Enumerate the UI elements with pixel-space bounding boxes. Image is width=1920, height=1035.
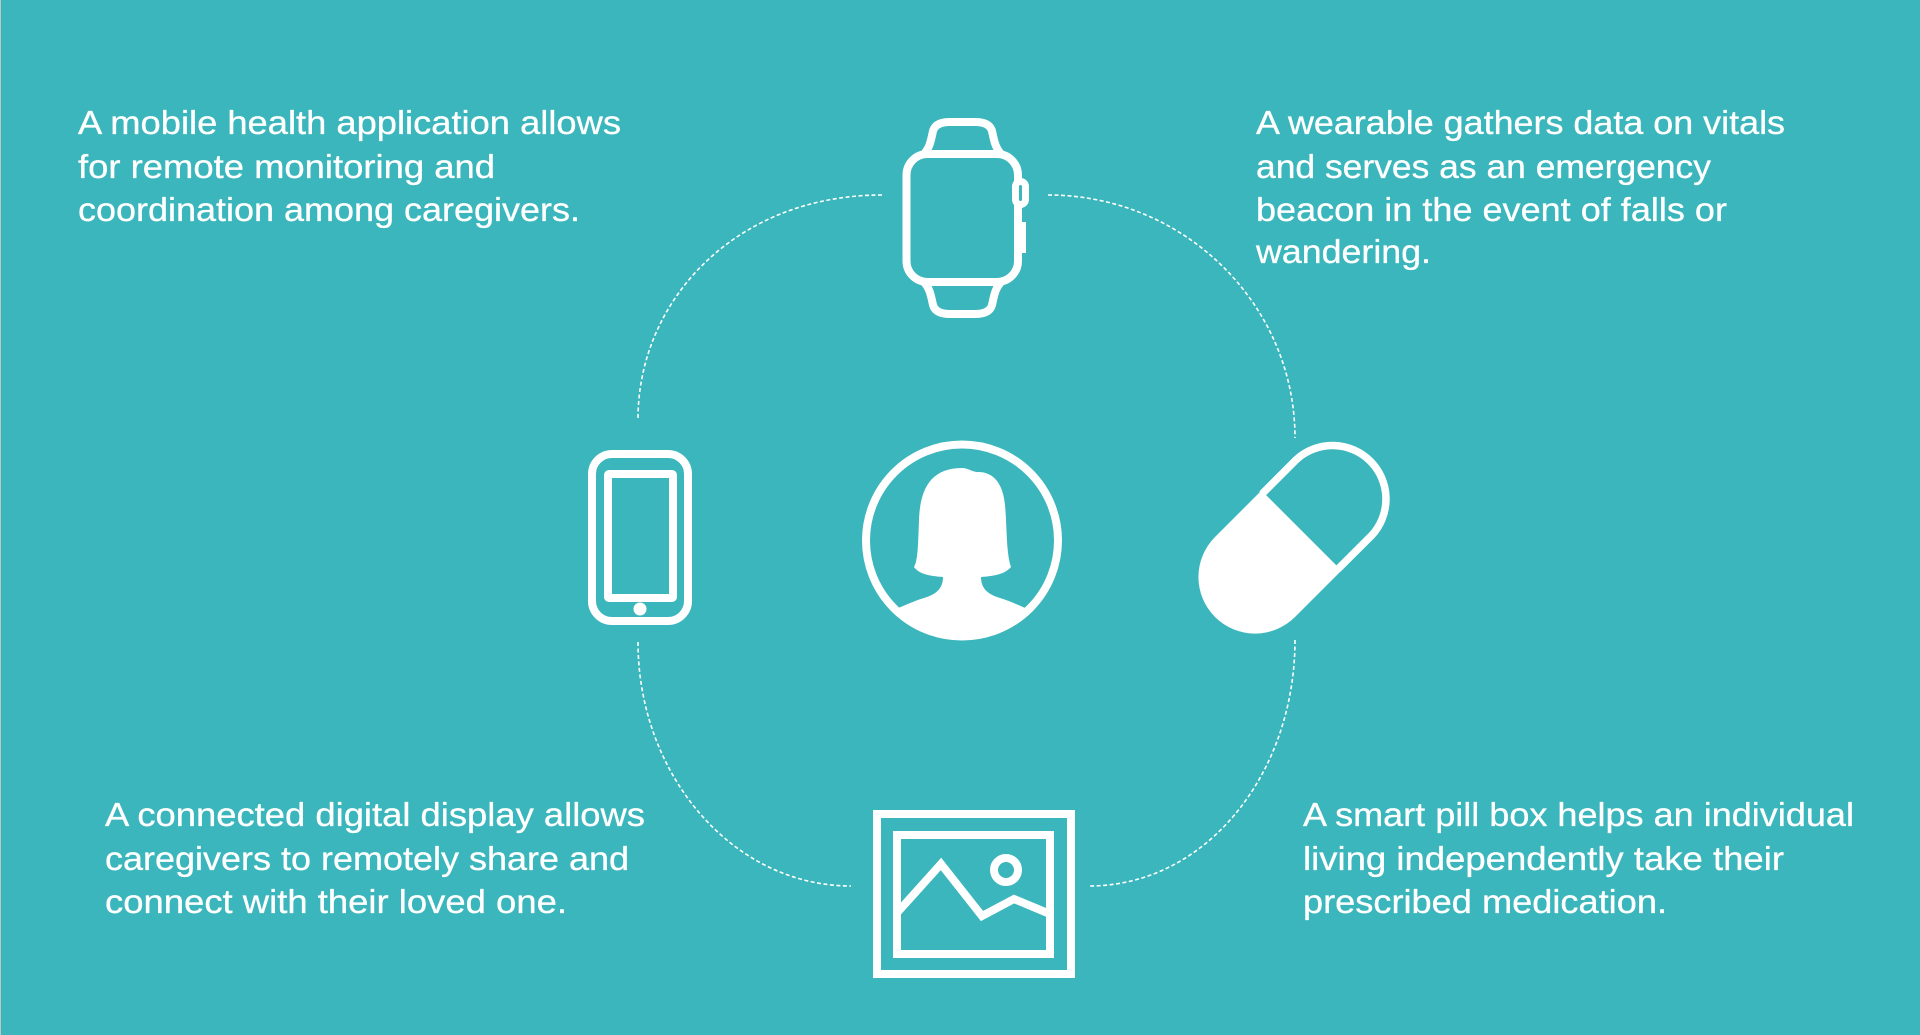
icon: picture frame (877, 814, 1071, 974)
dashed connector: top right (1048, 195, 1295, 438)
text: smart pill box: prescribed medication. (1303, 883, 1667, 920)
text: mobile health application (78, 104, 621, 228)
text: connected digital display: caregivers to remotely share and (105, 840, 629, 877)
dashed connector: top left (638, 195, 882, 419)
text: mobile health application: coordination among caregivers. (78, 191, 580, 228)
icon: smartphone (592, 454, 688, 621)
dashed connector: bottom right (1089, 640, 1295, 886)
icon: pill capsule (1198, 446, 1386, 634)
text: connected digital display (105, 796, 645, 920)
icon: person (866, 444, 1058, 636)
text: smart pill box (1303, 796, 1854, 920)
text: wearable: wandering. (1255, 233, 1431, 270)
text: connected digital display: connect with their loved one. (105, 883, 567, 920)
text: wearable: and serves as an emergency (1256, 148, 1712, 185)
text: mobile health application: A mobile health application allows (78, 104, 621, 141)
text: wearable (1255, 104, 1785, 270)
text: wearable: A wearable gathers data on vitals (1256, 104, 1785, 141)
icon: smartwatch (906, 122, 1026, 314)
text: mobile health application: for remote monitoring and (78, 148, 495, 185)
text: connected digital display: A connected digital display allows (105, 796, 645, 833)
text: smart pill box: A smart pill box helps an individual (1303, 796, 1854, 833)
dashed connector: bottom left (638, 642, 851, 886)
text: smart pill box: living independently take their (1303, 840, 1784, 877)
text: wearable: beacon in the event of falls or (1256, 191, 1727, 228)
